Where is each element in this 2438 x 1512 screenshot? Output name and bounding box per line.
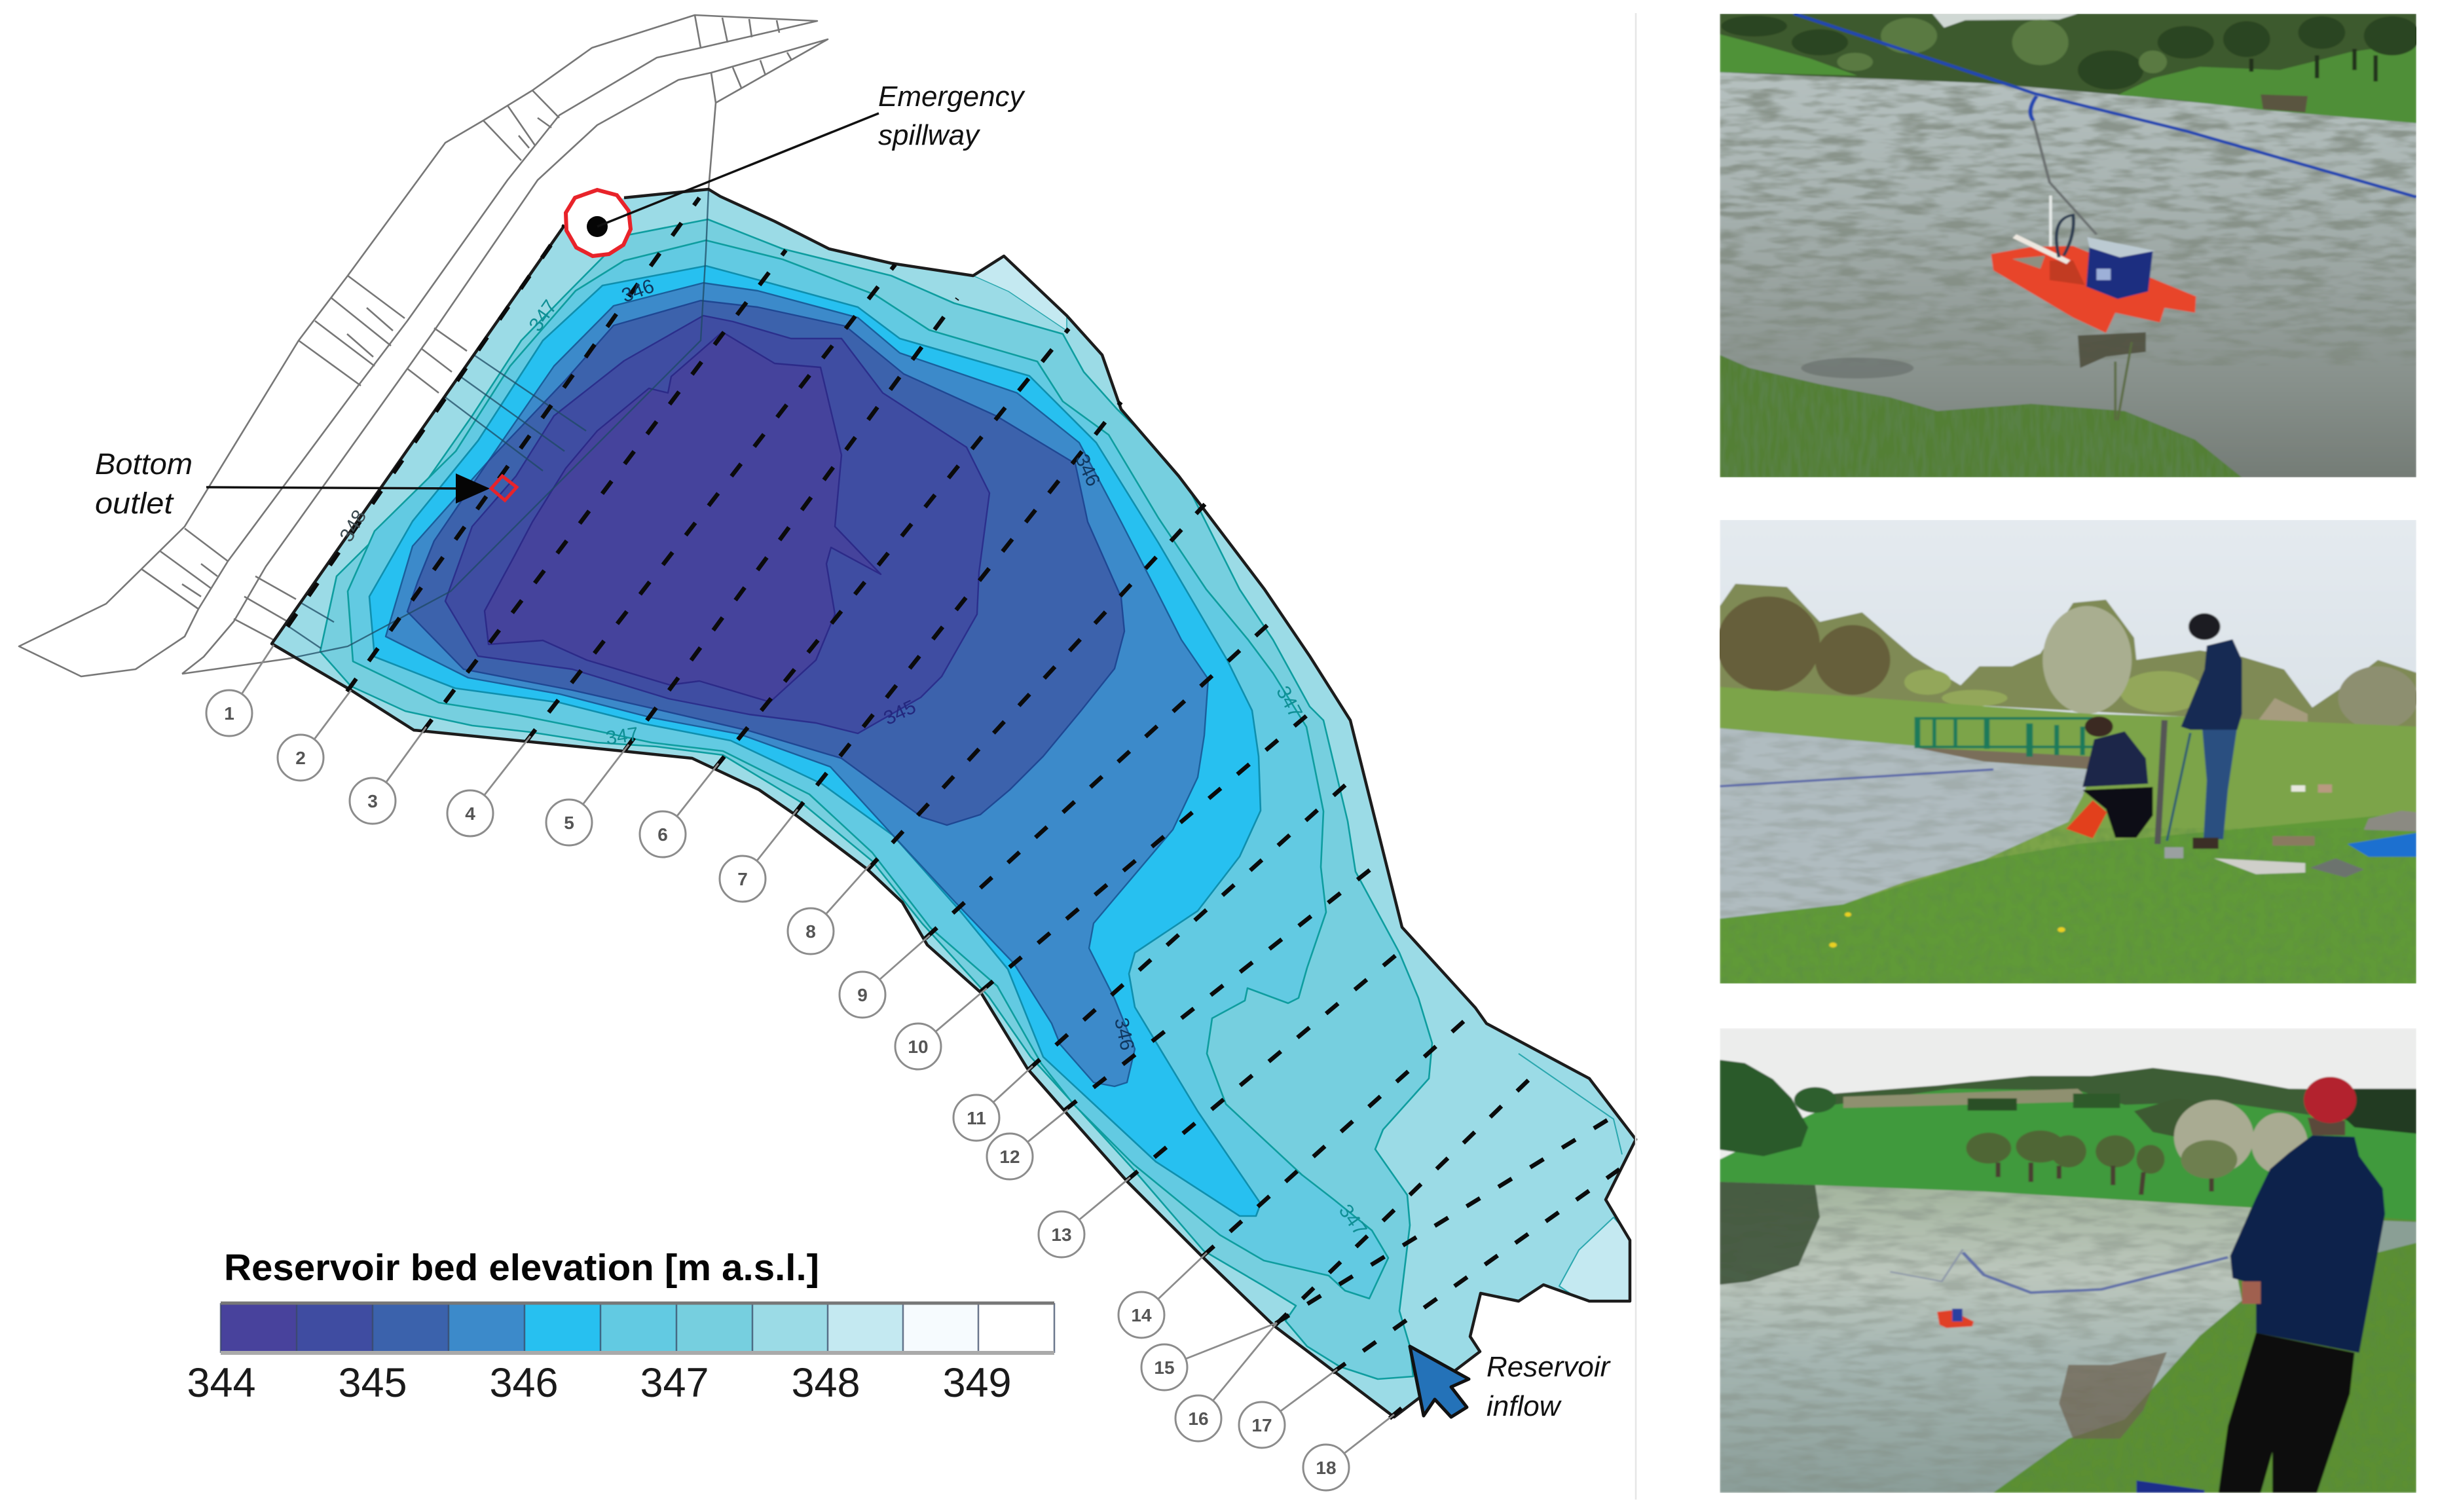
label: reservoir inflow [1487,1351,1612,1422]
legend colour bar [221,1303,1054,1353]
legend tick values [187,1360,1012,1406]
transect number markers: 8 [805,921,816,942]
transect number markers: 1 [224,703,234,724]
contour labels: 346 [1110,1016,1138,1052]
photo: survey boat on rope [1720,14,2420,477]
icon: emergency spillway marker [566,113,879,256]
photo: operator towing boat across reservoir [1720,1028,2416,1493]
contour labels [336,275,1371,1240]
legend tick values: 346 [489,1360,559,1406]
transect number markers: 6 [657,824,668,845]
transect number markers: 10 [908,1037,929,1057]
contour labels: 346 [1071,451,1104,490]
transect number markers: 17 [1251,1415,1272,1435]
bathymetry contour fills [244,183,1644,1428]
arrow: bottom outlet pointer [206,473,517,504]
label: bottom outlet [95,447,193,520]
transect number markers: 18 [1316,1458,1337,1478]
legend tick values: 345 [338,1360,407,1406]
label: emergency spillway: spillway [878,119,981,151]
transect number markers: 5 [564,813,574,833]
contour labels: 347 [604,724,640,749]
label: emergency spillway: Emergency [878,81,1026,113]
transect number markers: 14 [1131,1305,1152,1325]
transect number markers: 11 [967,1108,986,1128]
transect number markers: 15 [1154,1357,1175,1378]
transect number markers: 3 [367,791,378,811]
reservoir boundary [272,189,1636,1417]
transect number markers: 16 [1188,1409,1209,1429]
transect number markers: 9 [857,985,868,1005]
survey transect dashed lines [287,198,1623,1418]
transect number markers: 4 [465,803,475,824]
panel: reservoir bathymetry map [19,15,1644,1490]
label: emergency spillway [878,81,1026,151]
transect number markers [206,645,1394,1490]
legend tick values: 348 [791,1360,860,1406]
transect number markers: 13 [1051,1225,1072,1245]
legend tick values: 344 [187,1360,256,1406]
contour labels: 345 [881,696,919,729]
contour labels: 347 [525,296,561,335]
transect number markers: 7 [737,869,748,889]
contour labels: 346 [619,275,657,307]
contour labels: 347 [1335,1200,1371,1240]
transect number markers: 12 [999,1147,1020,1167]
legend tick values: 347 [640,1360,709,1406]
arrow: reservoir inflow [1410,1346,1469,1417]
contour labels: 348 [336,506,371,545]
legend tick values: 349 [942,1360,1012,1406]
photo: two surveyors on the bank [1716,520,2418,984]
legend title: Reservoir bed elevation [m a.s.l.] [224,1247,819,1289]
label: reservoir inflow: Reservoir [1487,1351,1612,1383]
legend: reservoir bed elevation [187,1247,1054,1406]
label: bottom outlet: outlet [95,487,175,520]
transect number markers: 2 [295,748,306,768]
label: bottom outlet: Bottom [95,447,193,481]
label: reservoir inflow: inflow [1487,1390,1562,1422]
dam and spillway channel outline [19,15,828,676]
contour labels: 347 [1272,682,1306,722]
